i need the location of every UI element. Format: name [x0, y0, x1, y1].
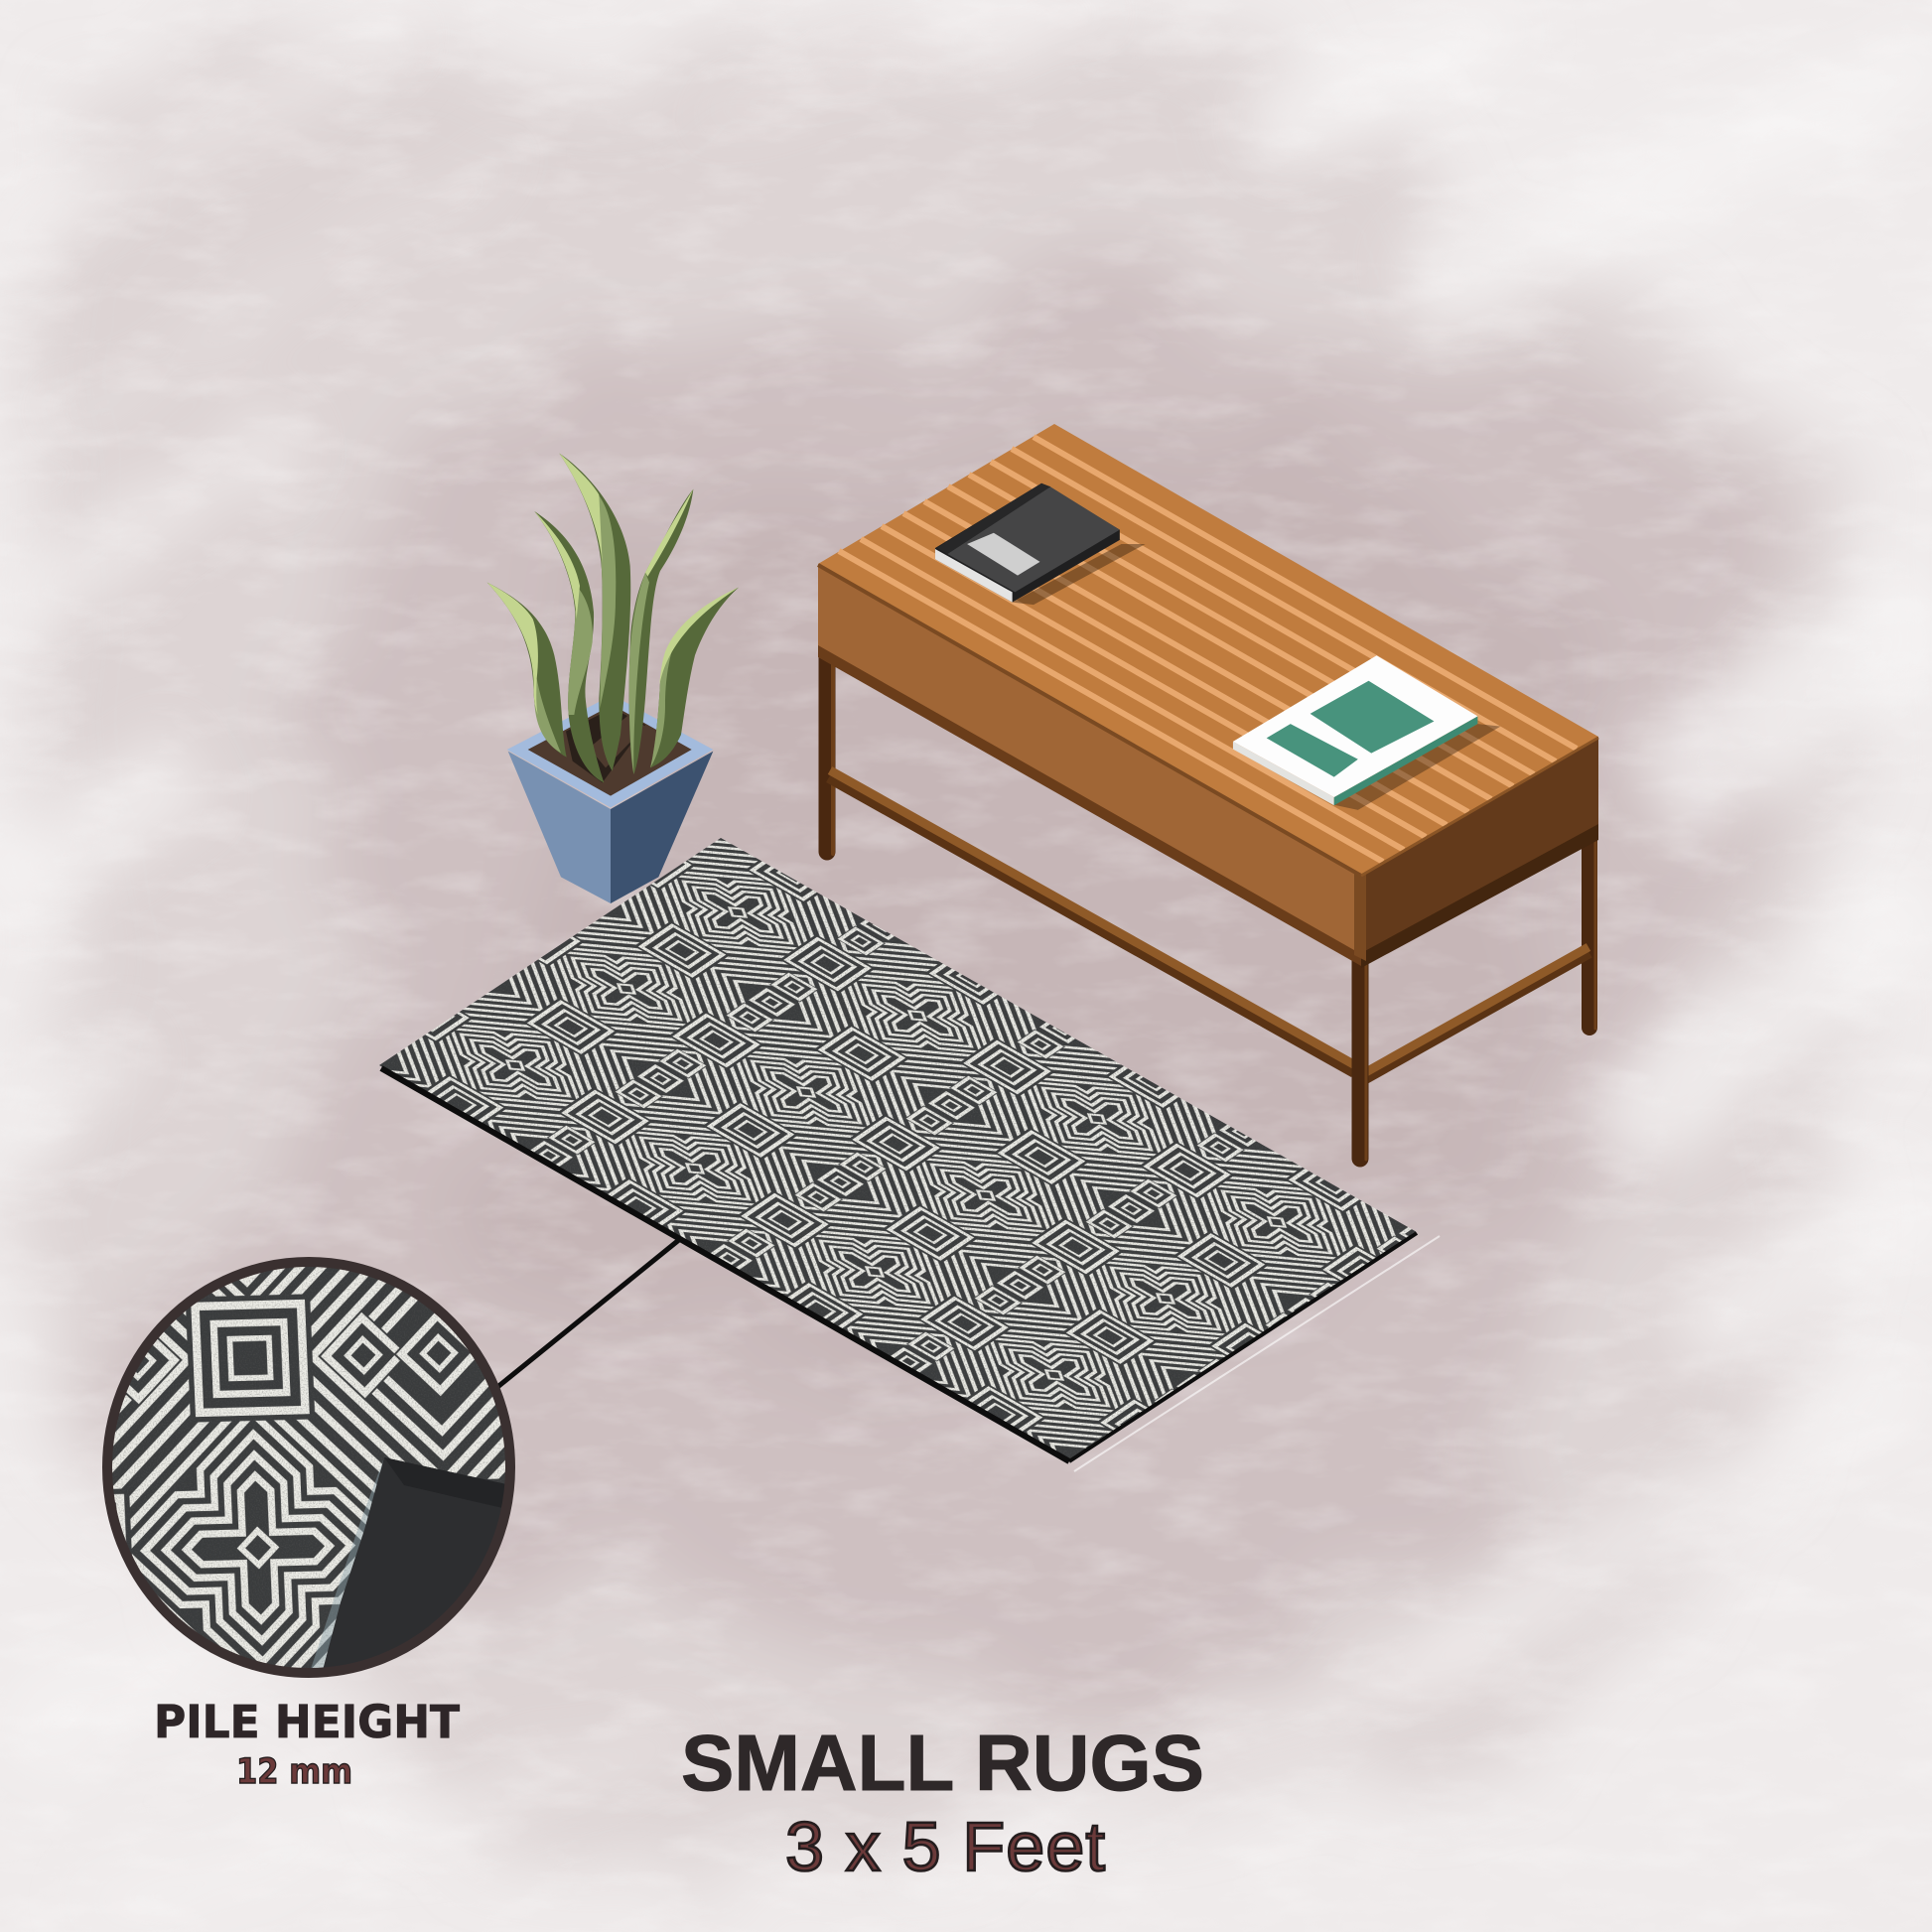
notebook on table	[935, 483, 1146, 605]
table legs	[827, 645, 1595, 1029]
magazine on table	[1233, 655, 1500, 810]
detail circle: rug close-up	[102, 1257, 515, 1678]
table stretchers	[830, 770, 1588, 1077]
patterned rug	[379, 838, 1440, 1471]
pile height label	[154, 1696, 460, 1792]
potted plant	[487, 454, 739, 903]
pile height label: 12 mm	[236, 1752, 352, 1792]
pile height label: PILE HEIGHT	[154, 1696, 460, 1748]
title: 3 x 5 Feet	[785, 1808, 1105, 1885]
title: SMALL RUGS	[681, 1719, 1204, 1807]
coffee table	[818, 424, 1598, 1160]
table apron long side	[818, 564, 1361, 959]
table apron short side	[1361, 737, 1598, 959]
plant pot	[507, 695, 713, 903]
connector line from rug to detail circle	[496, 1239, 680, 1388]
table top with stripes	[818, 424, 1598, 876]
title	[681, 1719, 1204, 1885]
plant leaves	[487, 454, 739, 782]
table front leg	[1360, 958, 1366, 1160]
